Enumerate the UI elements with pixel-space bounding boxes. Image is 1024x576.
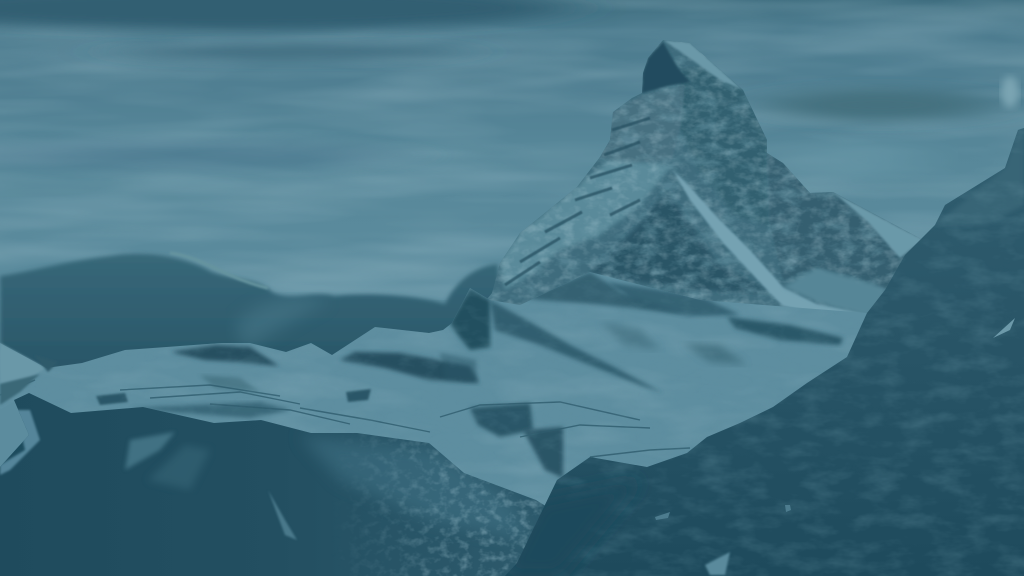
near rock peak xyxy=(450,288,490,350)
apron xyxy=(783,268,885,318)
west snow slope xyxy=(500,160,672,290)
east upper face xyxy=(680,67,770,225)
west upper face xyxy=(602,86,685,158)
thin melt lines in snow xyxy=(0,380,690,457)
band under peak xyxy=(727,317,843,345)
mid rock xyxy=(683,343,747,365)
summit ridge light xyxy=(663,40,743,90)
clouds behind ridge xyxy=(0,253,500,370)
bright east ridge xyxy=(833,192,923,258)
texture xyxy=(488,43,896,303)
summit dark face xyxy=(642,42,690,93)
diagonal ridge xyxy=(490,300,663,393)
snow band xyxy=(674,172,860,312)
main peak xyxy=(488,40,921,312)
forested left hill xyxy=(0,393,560,576)
snowfield and lower ridge xyxy=(0,272,866,504)
foreground right slope xyxy=(500,125,1024,576)
hill rock patches xyxy=(171,345,279,366)
dark wedge xyxy=(590,190,770,293)
east sub-face xyxy=(768,156,904,288)
rock above the snowfield xyxy=(530,272,680,315)
left rock peak snow xyxy=(0,343,58,405)
rock streaks on west face xyxy=(505,118,650,285)
